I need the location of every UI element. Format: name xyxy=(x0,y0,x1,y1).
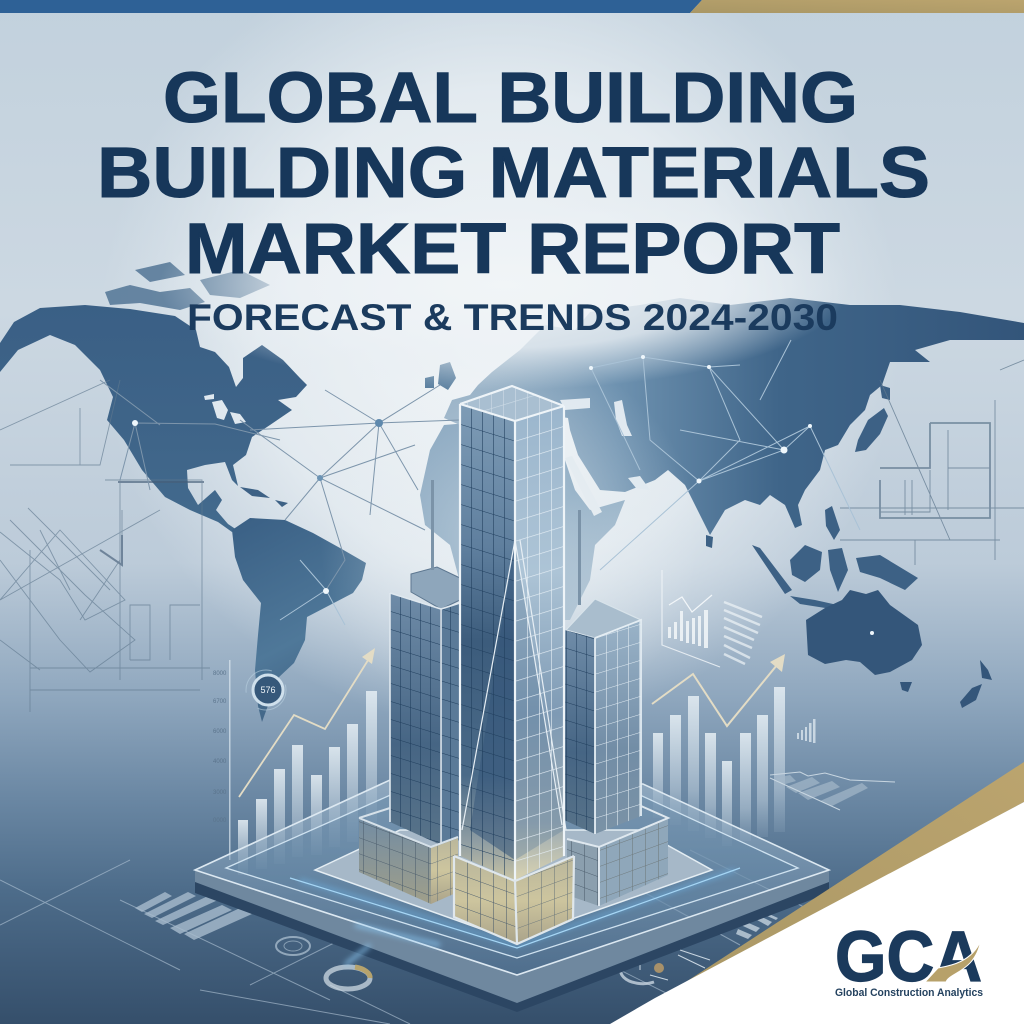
left chart axis xyxy=(229,660,230,860)
central podium xyxy=(454,856,574,944)
small bars, bottom right xyxy=(732,903,778,939)
right tower xyxy=(564,510,641,834)
glow behind subtitle xyxy=(160,180,850,390)
left chart axis labels: 0000 xyxy=(213,818,227,824)
small bars far right xyxy=(797,719,816,743)
corner white panel xyxy=(610,802,1024,1024)
subtitle: FORECAST & TRENDS 2024-2030 xyxy=(187,297,838,338)
map: Southeast Asian islands xyxy=(706,506,918,610)
left chart axis labels: 3000 xyxy=(213,790,227,796)
map: Arctic islands xyxy=(105,262,270,310)
title xyxy=(97,59,930,289)
central tower xyxy=(460,386,566,880)
map: South America xyxy=(232,518,366,722)
left chart axis labels: 6000 xyxy=(213,729,227,735)
ground lines and widgets xyxy=(0,850,860,1024)
left tower antenna xyxy=(431,480,434,570)
map: Great Lakes xyxy=(204,394,246,424)
map: New Zealand xyxy=(960,660,992,708)
map: inland seas xyxy=(560,398,650,490)
platform inner ring xyxy=(226,793,798,958)
top banner xyxy=(0,0,1024,13)
map: Red Sea gap xyxy=(565,456,602,516)
logo gold swoosh xyxy=(925,940,981,982)
world map xyxy=(0,262,1024,722)
logo name: Global Construction Analytics xyxy=(835,987,983,999)
map: Eurasia xyxy=(444,298,1024,535)
map: UK and Greenland fragments xyxy=(425,362,456,390)
building slab xyxy=(315,830,712,940)
right podium xyxy=(567,806,668,906)
glow behind tower xyxy=(300,340,720,740)
right bar chart xyxy=(653,687,785,846)
map: Africa xyxy=(420,422,625,620)
title: GLOBAL BUILDING xyxy=(163,59,858,138)
corner gold wedge xyxy=(655,762,1024,1002)
light streak xyxy=(345,925,440,965)
percentage gauge: 576 xyxy=(260,685,276,695)
donut widget, left xyxy=(276,937,310,955)
map: North America xyxy=(0,305,307,532)
logo xyxy=(835,918,983,999)
left chart axis labels xyxy=(213,671,227,824)
left chart axis labels: 4000 xyxy=(213,759,227,765)
map: Caribbean islands xyxy=(240,487,288,507)
right blueprint drawing xyxy=(840,360,1024,565)
percentage gauge xyxy=(246,670,286,710)
left chart axis labels: 6700 xyxy=(213,699,227,705)
left blueprint drawing xyxy=(0,380,210,712)
title: MARKET REPORT xyxy=(185,210,840,289)
map: Australia xyxy=(806,590,922,692)
network nodes xyxy=(132,355,874,635)
right tower antenna xyxy=(578,510,581,605)
platform base xyxy=(195,780,829,1012)
left podium xyxy=(359,808,458,904)
platform shadow xyxy=(195,880,829,1012)
platform blue glow xyxy=(300,870,735,945)
left tower xyxy=(390,480,460,845)
donut widget, centre xyxy=(326,967,370,989)
platform side xyxy=(195,870,829,1003)
skewed report chart, right xyxy=(770,772,895,810)
corner panel xyxy=(610,762,1024,1024)
skewed report chart, bottom left xyxy=(135,892,252,940)
platform top glass xyxy=(195,780,829,975)
small dashboard chart, right xyxy=(662,570,762,667)
map: Japan and Korea xyxy=(855,385,890,452)
network connection lines xyxy=(100,340,874,635)
left growth arrow xyxy=(239,648,375,797)
building complex xyxy=(359,386,668,944)
left chart axis labels: 8000 xyxy=(213,671,227,677)
donut widget, right xyxy=(621,950,710,984)
left bar chart xyxy=(213,660,377,875)
banner gold segment xyxy=(690,0,1024,13)
logo letters: GCA xyxy=(835,918,982,997)
banner blue segment xyxy=(0,0,702,13)
background glow xyxy=(0,0,1024,760)
right growth arrow xyxy=(652,654,785,726)
title: BUILDING MATERIALS xyxy=(97,134,930,213)
